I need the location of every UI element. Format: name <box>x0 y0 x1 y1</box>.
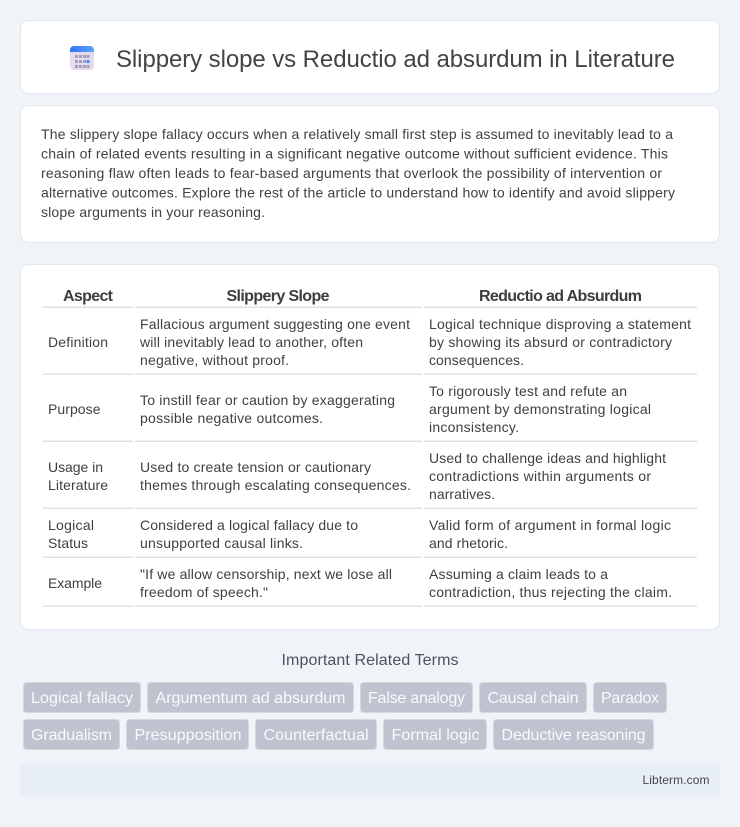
row: usage in literature: Used to create tension or cautionary <box>140 459 371 475</box>
row: usage in literature <box>48 450 666 502</box>
row: logical status: and rhetoric. <box>429 535 508 551</box>
title: Slippery slope vs Reductio ad absurdum in Literature <box>116 46 675 73</box>
tag: deductive reasoning <box>494 720 654 750</box>
row: purpose: To rigorously test and refute an <box>429 383 627 399</box>
row: logical status: Status <box>48 535 88 551</box>
row: definition: Fallacious argument suggesting one event <box>140 316 410 332</box>
row: usage in literature: Usage in <box>48 459 103 475</box>
row: purpose: possible negative outcomes. <box>140 410 323 426</box>
row: logical status: unsupported causal links. <box>140 535 303 551</box>
text block: introduction: The slippery slope fallacy occurs when a relatively small first step is assumed to inevitably lead to a <box>41 126 673 142</box>
row: example: "If we allow censorship, next we lose all <box>140 566 392 582</box>
row: purpose: Purpose <box>48 401 101 417</box>
text block: introduction: reasoning flaw often leads to fear-based arguments that overlook the possibility of intervention or <box>41 165 662 181</box>
row: usage in literature: Literature <box>48 477 108 493</box>
tag: argumentum ad absurdum <box>148 682 354 712</box>
tag: logical fallacy <box>24 682 140 712</box>
table header: Slippery Slope <box>226 288 330 305</box>
row: definition: by showing its absurd or contradictory <box>429 334 672 350</box>
row: definition <box>48 316 691 368</box>
icon: calendar <box>70 46 94 70</box>
table header: Reductio ad Absurdum <box>479 288 642 305</box>
row: logical status: Valid form of argument in formal logic <box>429 517 671 533</box>
text block: introduction: slope arguments in your reasoning. <box>41 204 265 220</box>
tag: formal logic: Formal logic <box>392 727 480 744</box>
row: usage in literature: Used to challenge ideas and highlight <box>429 450 666 466</box>
footer credit: Libterm.com <box>642 773 710 787</box>
tag: presupposition <box>126 720 248 750</box>
row: definition: will inevitably lead to another, often <box>139 334 363 350</box>
row: logical status: Considered a logical fallacy due to <box>140 517 358 533</box>
row: example: Example <box>48 575 102 591</box>
tag: argumentum ad absurdum: Argumentum ad absurdum <box>156 690 346 707</box>
tag: paradox: Paradox <box>601 690 659 707</box>
row: definition: consequences. <box>429 352 524 368</box>
row: example: contradiction, thus rejecting the claim. <box>429 584 672 600</box>
panel: comparison table <box>20 264 720 630</box>
tag: logical fallacy: Logical fallacy <box>31 690 133 707</box>
table header <box>63 288 642 305</box>
text block: introduction <box>41 126 675 220</box>
row: definition: Logical technique disproving a statement <box>429 316 691 332</box>
row: example: freedom of speech." <box>140 584 268 600</box>
tag: counterfactual: Counterfactual <box>264 727 368 744</box>
row: purpose <box>48 383 651 435</box>
tag: false analogy <box>360 682 472 712</box>
row: usage in literature: themes through escalating consequences. <box>140 477 411 493</box>
tag: causal chain <box>480 682 586 712</box>
tag: false analogy: False analogy <box>368 690 465 707</box>
row: purpose: inconsistency. <box>429 419 519 435</box>
tag: deductive reasoning: Deductive reasoning <box>502 727 646 744</box>
row: definition: negative, without proof. <box>140 352 289 368</box>
row: usage in literature: narratives. <box>429 486 495 502</box>
panel: introduction <box>20 106 720 242</box>
row: definition: Definition <box>48 334 108 350</box>
tags <box>24 682 666 750</box>
row: example <box>48 566 672 600</box>
row: usage in literature: contradictions within arguments or <box>429 468 651 484</box>
panel: header <box>20 20 720 94</box>
table rules <box>43 306 697 607</box>
tag: gradualism: Gradualism <box>31 727 112 744</box>
heading: important related terms: Important Related Terms <box>282 652 458 669</box>
row: example: Assuming a claim leads to a <box>429 566 608 582</box>
text block: introduction: alternative outcomes. Explore the rest of the article to understand how to identify and avoid slippery <box>41 184 675 200</box>
tag: counterfactual <box>256 720 376 750</box>
row: logical status: Logical <box>48 517 94 533</box>
footer <box>20 763 720 797</box>
row: logical status <box>48 517 671 551</box>
tag: causal chain: Causal chain <box>488 690 578 707</box>
tag: gradualism <box>24 720 120 750</box>
row: purpose: argument by demonstrating logical <box>429 401 651 417</box>
text block: introduction: chain of related events resulting in a significant negative outcome without sufficient evidence. This <box>41 146 668 162</box>
table header: Aspect <box>63 288 114 305</box>
tag: paradox <box>594 682 666 712</box>
tag: formal logic <box>384 720 486 750</box>
tag: presupposition: Presupposition <box>134 727 242 744</box>
row: purpose: To instill fear or caution by exaggerating <box>140 392 395 408</box>
